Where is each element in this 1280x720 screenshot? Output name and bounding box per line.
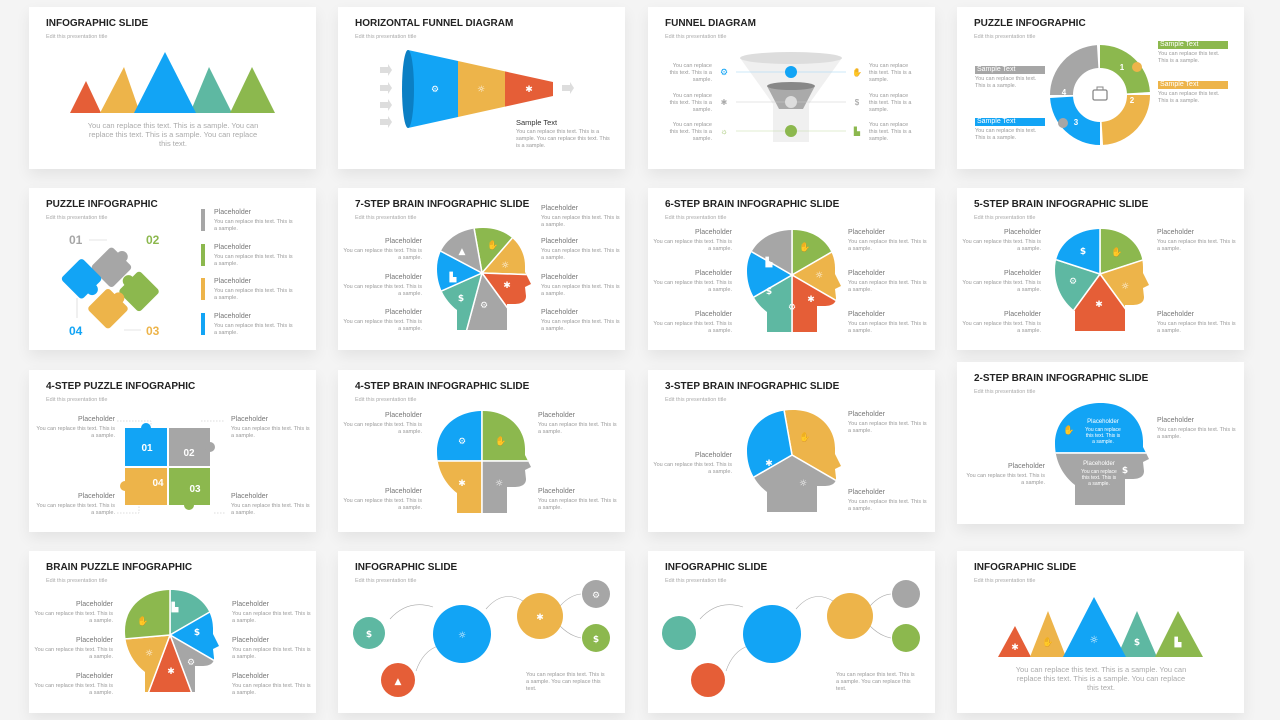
ring graphic: 2: [1130, 96, 1135, 105]
head chart: ✱: [503, 281, 511, 291]
title: PUZZLE INFOGRAPHIC: [974, 18, 1086, 29]
ring graphic: [1050, 45, 1150, 145]
card 6: 7-step brain: You can replace this text. This is a sample.: [541, 248, 620, 261]
head chart: ☼: [495, 479, 503, 489]
subtitle: Edit this presentation title: [46, 215, 107, 221]
head chart: ✋: [799, 431, 811, 443]
head chart: ✱: [1095, 300, 1103, 310]
card 6: 7-step brain: Placeholder: [541, 309, 578, 316]
head chart: ⚙: [1069, 277, 1077, 287]
right placeholders: You can replace this text. This is a sample.: [538, 422, 617, 435]
card 9: 4-step puzzle: You can replace this text. This is a sample.: [36, 503, 115, 516]
left placeholders: Placeholder: [76, 601, 113, 608]
head chart: $: [1080, 247, 1086, 257]
left placeholder: [966, 462, 1045, 486]
triangle chart: $: [1134, 638, 1140, 648]
left placeholder: You can replace this text. This is a sample.: [653, 462, 732, 475]
label 4: Sample Text: [977, 66, 1015, 73]
right placeholders: Placeholder: [848, 411, 885, 418]
right placeholders: Placeholder: [232, 601, 269, 608]
subtitle: Edit this presentation title: [46, 578, 107, 584]
card 16: triangles with icons: [957, 551, 1244, 713]
puzzle graphic: [62, 209, 205, 338]
right placeholders: Placeholder: [1157, 229, 1194, 236]
sample text: Sample Text: [516, 118, 557, 127]
card 6: 7-step brain: You can replace this text. This is a sample.: [343, 319, 422, 332]
card 2: horizontal funnel: [338, 7, 625, 169]
card 10: 4-step brain: Placeholder: [385, 488, 422, 495]
card 11: 3-step brain: [648, 370, 935, 532]
card 5: puzzle infographic pieces: Placeholder: [214, 313, 251, 320]
head chart: ✋: [1111, 246, 1123, 258]
card 5: puzzle infographic pieces: You can replace this text. This is a sample.: [214, 288, 293, 301]
label 4: You can replace this text. This is a sample.: [975, 76, 1036, 89]
right placeholders: Placeholder: [538, 412, 575, 419]
card 6: 7-step brain: Placeholder: [385, 274, 422, 281]
title: 4-STEP BRAIN INFOGRAPHIC SLIDE: [355, 381, 529, 392]
triangle chart: ☼: [1090, 635, 1099, 646]
head puzzle: $: [194, 628, 200, 638]
puzzle grid: 02: [183, 448, 195, 459]
title: 4-STEP PUZZLE INFOGRAPHIC: [46, 381, 195, 392]
subtitle: Edit this presentation title: [974, 389, 1035, 395]
head chart: a sample.: [1092, 439, 1114, 445]
card 6: 7-step brain: Placeholder: [385, 309, 422, 316]
ring graphic: 4: [1062, 88, 1067, 97]
card 4: puzzle ring: [957, 7, 1244, 169]
ring graphic: 1: [1120, 63, 1125, 72]
card 13: brain puzzle: You can replace this text. This is a sample.: [232, 683, 311, 696]
left placeholder: Placeholder: [1008, 463, 1045, 470]
funnel graphic: ☼: [720, 127, 728, 136]
subtitle: Edit this presentation title: [355, 578, 416, 584]
subtitle: Edit this presentation title: [355, 397, 416, 403]
card 7: 6-step brain: [648, 188, 935, 350]
right placeholder: Placeholder: [1157, 417, 1194, 424]
card 10: 4-step brain: You can replace this text. This is a sample.: [538, 498, 617, 511]
head chart: ☼: [1121, 282, 1129, 292]
circle flow: $: [593, 635, 599, 645]
card 9: 4-step puzzle: Placeholder: [231, 493, 268, 500]
head chart: You can replace: [1081, 469, 1117, 475]
card 8: 5-step brain: You can replace this text. This is a sample.: [962, 280, 1041, 293]
funnel graphic: ✱: [721, 98, 728, 107]
head puzzle: ✋: [137, 615, 149, 627]
puzzle grid: 01: [141, 443, 153, 454]
label 3: Sample Text: [977, 118, 1015, 125]
puzzle grid: [117, 420, 224, 514]
card 1: infographic slide triangles: [29, 7, 316, 169]
card 13: brain puzzle: [29, 551, 316, 713]
right placeholders: Placeholder: [231, 416, 268, 423]
head chart: Placeholder: [1083, 461, 1115, 467]
circle flow: [662, 580, 920, 697]
card 5: puzzle infographic pieces: [29, 188, 316, 350]
left placeholders: Placeholder: [385, 238, 422, 245]
sample text: You can replace this text. This is a sample. You can replace this text. This is a sample.: [516, 129, 610, 149]
triangle chart: ✱: [1011, 643, 1019, 653]
right placeholders: [848, 410, 927, 434]
head puzzle: ▙: [171, 601, 180, 613]
card 13: brain puzzle: Placeholder: [76, 673, 113, 680]
head chart: ▙: [765, 256, 774, 268]
label 1: [1158, 41, 1228, 64]
card 10: 4-step brain: [338, 370, 625, 532]
head chart: ✋: [495, 435, 507, 447]
left placeholders: You can replace this text. This is a sample.: [653, 239, 732, 252]
title: 3-STEP BRAIN INFOGRAPHIC SLIDE: [665, 381, 839, 392]
triangle chart: ▙: [1174, 636, 1183, 648]
card 7: 6-step brain: You can replace this text. This is a sample.: [653, 280, 732, 293]
title: INFOGRAPHIC SLIDE: [46, 18, 148, 29]
card 10: 4-step brain: You can replace this text. This is a sample.: [343, 498, 422, 511]
head chart: ✱: [765, 459, 773, 469]
triangle chart: [70, 52, 275, 113]
right placeholders: [541, 204, 620, 228]
head chart: ⚙: [788, 303, 796, 313]
body text: You can replace this text. This is a sample. You can replace this text. This is a sample. You can replace this text.: [88, 121, 258, 148]
funnel graphic: ▙: [853, 126, 861, 136]
puzzle graphic: 04: [69, 324, 83, 338]
subtitle: Edit this presentation title: [665, 215, 726, 221]
head chart: $: [766, 287, 772, 297]
right placeholders: [231, 416, 310, 439]
head puzzle: [125, 590, 219, 692]
head chart: ✋: [1063, 424, 1075, 436]
head chart: a sample.: [1088, 481, 1110, 487]
ring graphic: 3: [1074, 118, 1079, 127]
right placeholders: You can replace this text. This is a sample.: [231, 426, 310, 439]
card 3: funnel diagram: You can replace this text. This is a sample.: [670, 93, 712, 113]
card 8: 5-step brain: Placeholder: [1004, 270, 1041, 277]
card 9: 4-step puzzle: Placeholder: [78, 493, 115, 500]
head chart: Placeholder: [1087, 419, 1119, 425]
head puzzle: ⚙: [187, 658, 195, 668]
card 13: brain puzzle: You can replace this text. This is a sample.: [232, 647, 311, 660]
card 13: brain puzzle: Placeholder: [232, 637, 269, 644]
body text: You can replace this text. This is a sample. You can replace this text. This is a sample. You can replace this text.: [1016, 665, 1186, 692]
right placeholders: You can replace this text. This is a sample.: [1157, 239, 1236, 252]
list items: You can replace this text. This is a sample.: [214, 219, 293, 232]
card 3: funnel diagram: You can replace this text. This is a sample.: [869, 122, 911, 142]
funnel graphic: ⚙: [720, 67, 728, 77]
body text: You can replace this text. This is a sample. You can replace this text.: [836, 672, 915, 692]
label 3: [975, 118, 1045, 141]
title: 2-STEP BRAIN INFOGRAPHIC SLIDE: [974, 373, 1148, 384]
puzzle grid: 03: [189, 484, 201, 495]
left placeholders: Placeholder: [78, 416, 115, 423]
puzzle graphic: 02: [146, 233, 160, 247]
card 8: 5-step brain: You can replace this text. This is a sample.: [1157, 321, 1236, 334]
card 6: 7-step brain: [338, 188, 625, 350]
left placeholders: [343, 238, 422, 261]
right placeholders: Placeholder: [541, 205, 578, 212]
left placeholders: You can replace this text. This is a sample.: [34, 611, 113, 624]
card 5: puzzle infographic pieces: Placeholder: [214, 278, 251, 285]
card 7: 6-step brain: You can replace this text. This is a sample.: [653, 321, 732, 334]
right placeholder: You can replace this text. This is a sample.: [1157, 427, 1236, 440]
head chart: ▲: [459, 247, 466, 257]
card 13: brain puzzle: Placeholder: [76, 637, 113, 644]
left placeholders: You can replace this text. This is a sample.: [343, 422, 422, 435]
title: INFOGRAPHIC SLIDE: [974, 562, 1076, 573]
right placeholders: You can replace this text. This is a sample.: [541, 215, 620, 228]
right placeholders: [1157, 228, 1236, 252]
card 9: 4-step puzzle: [29, 370, 316, 532]
card 7: 6-step brain: You can replace this text. This is a sample.: [848, 321, 927, 334]
subtitle: Edit this presentation title: [46, 34, 107, 40]
puzzle grid: 04: [152, 478, 164, 489]
circle flow: [353, 580, 610, 697]
title: PUZZLE INFOGRAPHIC: [46, 199, 158, 210]
subtitle: Edit this presentation title: [974, 34, 1035, 40]
left placeholders: [653, 228, 732, 252]
sample text: [516, 118, 610, 149]
title: 6-STEP BRAIN INFOGRAPHIC SLIDE: [665, 199, 839, 210]
right placeholders: [232, 600, 311, 624]
label 3: You can replace this text. This is a sample.: [975, 128, 1036, 141]
subtitle: Edit this presentation title: [665, 578, 726, 584]
label 2: [1158, 81, 1228, 104]
circle flow: ✱: [536, 613, 544, 623]
card 15: circles flow plain: [648, 551, 935, 713]
triangle chart: ✋: [1042, 636, 1054, 648]
head chart: ☼: [501, 261, 509, 271]
card 3: funnel diagram: You can replace this text. This is a sample.: [869, 93, 911, 113]
circle flow: ▲: [395, 677, 402, 687]
list items: [214, 208, 293, 232]
subtitle: Edit this presentation title: [46, 397, 107, 403]
card 8: 5-step brain: You can replace this text. This is a sample.: [962, 321, 1041, 334]
title: 5-STEP BRAIN INFOGRAPHIC SLIDE: [974, 199, 1148, 210]
head chart: [747, 230, 841, 332]
title: 7-STEP BRAIN INFOGRAPHIC SLIDE: [355, 199, 529, 210]
head chart: ☼: [815, 271, 823, 281]
card 11: 3-step brain: You can replace this text. This is a sample.: [848, 499, 927, 512]
card 12: 2-step brain: [957, 362, 1244, 524]
head puzzle: ☼: [145, 649, 153, 659]
label 2: You can replace this text. This is a sample.: [1158, 91, 1219, 104]
card 5: puzzle infographic pieces: You can replace this text. This is a sample.: [214, 254, 293, 267]
card 3: funnel diagram: You can replace this text. This is a sample.: [670, 122, 712, 142]
title: BRAIN PUZZLE INFOGRAPHIC: [46, 562, 192, 573]
left placeholders: [962, 228, 1041, 252]
funnel graphic: ✋: [852, 67, 862, 77]
title: INFOGRAPHIC SLIDE: [355, 562, 457, 573]
card 7: 6-step brain: Placeholder: [695, 311, 732, 318]
right placeholders: [538, 412, 617, 435]
card 13: brain puzzle: You can replace this text. This is a sample.: [34, 683, 113, 696]
head chart: ▙: [449, 271, 458, 283]
card 6: 7-step brain: Placeholder: [541, 274, 578, 281]
funnel graphic: [720, 52, 862, 142]
subtitle: Edit this presentation title: [355, 34, 416, 40]
circle flow: $: [366, 630, 372, 640]
card 6: 7-step brain: Placeholder: [541, 238, 578, 245]
card 5: puzzle infographic pieces: Placeholder: [214, 244, 251, 251]
label 1: You can replace this text. This is a sample.: [1158, 51, 1219, 64]
left placeholder: [653, 452, 732, 475]
funnel graphic: ⚙: [431, 85, 439, 95]
head chart: this text. This is: [1086, 433, 1121, 439]
left placeholders: Placeholder: [1004, 229, 1041, 236]
subtitle: Edit this presentation title: [665, 34, 726, 40]
label 4: [975, 66, 1045, 89]
puzzle graphic: 01: [69, 233, 83, 247]
funnel graphic: $: [855, 98, 860, 107]
head chart: ✋: [487, 239, 499, 251]
card 6: 7-step brain: You can replace this text. This is a sample.: [541, 319, 620, 332]
card 11: 3-step brain: Placeholder: [848, 489, 885, 496]
card 5: puzzle infographic pieces: You can replace this text. This is a sample.: [214, 323, 293, 336]
left placeholders: You can replace this text. This is a sample.: [36, 426, 115, 439]
label 2: Sample Text: [1160, 81, 1198, 88]
title: INFOGRAPHIC SLIDE: [665, 562, 767, 573]
left placeholders: [36, 416, 115, 439]
card 8: 5-step brain: Placeholder: [1157, 311, 1194, 318]
body text: You can replace this text. This is a sample. You can replace this text.: [526, 672, 605, 692]
card 8: 5-step brain: [957, 188, 1244, 350]
right texts: You can replace this text. This is a sample.: [869, 63, 911, 83]
right placeholders: You can replace this text. This is a sample.: [232, 611, 311, 624]
subtitle: Edit this presentation title: [355, 215, 416, 221]
head chart: this text. This is: [1082, 475, 1117, 481]
puzzle graphic: 03: [146, 324, 160, 338]
label 1: Sample Text: [1160, 41, 1198, 48]
head chart: ⚙: [480, 301, 488, 311]
head puzzle: ✱: [167, 667, 175, 677]
left placeholder: You can replace this text. This is a sample.: [966, 473, 1045, 486]
right placeholders: Placeholder: [848, 229, 885, 236]
left placeholders: [343, 412, 422, 435]
list items: Placeholder: [214, 209, 251, 216]
card 13: brain puzzle: Placeholder: [232, 673, 269, 680]
card 10: 4-step brain: Placeholder: [538, 488, 575, 495]
left placeholders: [34, 600, 113, 624]
subtitle: Edit this presentation title: [974, 578, 1035, 584]
title: FUNNEL DIAGRAM: [665, 18, 756, 29]
subtitle: Edit this presentation title: [665, 397, 726, 403]
title: HORIZONTAL FUNNEL DIAGRAM: [355, 18, 513, 29]
card 8: 5-step brain: Placeholder: [1004, 311, 1041, 318]
left placeholders: You can replace this text. This is a sample.: [962, 239, 1041, 252]
head chart: [437, 228, 531, 330]
left placeholder: Placeholder: [695, 452, 732, 459]
card 14: circles flow with icons: [338, 551, 625, 713]
head chart: ✱: [458, 479, 466, 489]
head chart: You can replace: [1085, 427, 1121, 433]
head chart: ✋: [799, 241, 811, 253]
card 7: 6-step brain: Placeholder: [848, 270, 885, 277]
right placeholders: [848, 228, 927, 252]
head chart: $: [1122, 466, 1128, 476]
card 9: 4-step puzzle: You can replace this text. This is a sample.: [231, 503, 310, 516]
head chart: [1055, 403, 1149, 505]
subtitle: Edit this presentation title: [974, 215, 1035, 221]
card 13: brain puzzle: You can replace this text. This is a sample.: [34, 647, 113, 660]
head chart: ✱: [807, 295, 815, 305]
card 7: 6-step brain: Placeholder: [695, 270, 732, 277]
head chart: ☼: [799, 479, 807, 489]
card 6: 7-step brain: You can replace this text. This is a sample.: [343, 284, 422, 297]
head chart: [437, 411, 531, 513]
card 7: 6-step brain: Placeholder: [848, 311, 885, 318]
funnel graphic: [380, 50, 574, 128]
head chart: [1055, 229, 1149, 331]
card 7: 6-step brain: You can replace this text. This is a sample.: [848, 280, 927, 293]
funnel graphic: ✱: [525, 85, 533, 95]
triangle chart: [998, 597, 1203, 657]
circle flow: ☼: [458, 631, 466, 641]
head chart: ⚙: [458, 437, 466, 447]
right placeholders: You can replace this text. This is a sample.: [848, 239, 927, 252]
left placeholders: Placeholder: [695, 229, 732, 236]
left texts: You can replace this text. This is a sample.: [670, 63, 712, 83]
head chart: $: [458, 294, 464, 304]
left placeholders: Placeholder: [385, 412, 422, 419]
circle flow: ⚙: [592, 591, 600, 601]
right placeholder: [1157, 416, 1236, 440]
card 3: funnel diagram: [648, 7, 935, 169]
right placeholders: You can replace this text. This is a sample.: [848, 421, 927, 434]
left placeholders: You can replace this text. This is a sample.: [343, 248, 422, 261]
card 6: 7-step brain: You can replace this text. This is a sample.: [541, 284, 620, 297]
head chart: [747, 410, 841, 512]
funnel graphic: ☼: [477, 85, 485, 95]
